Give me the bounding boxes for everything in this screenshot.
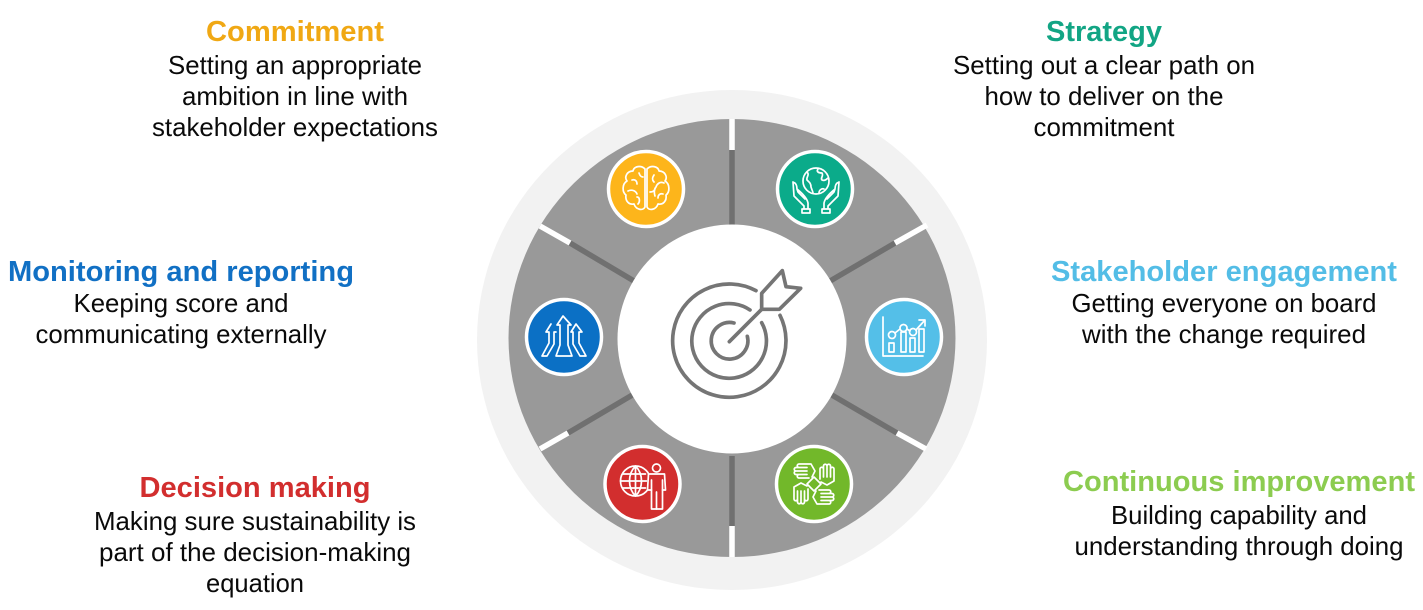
- text block: Stakeholder engagement: Stakeholder engagement: [1051, 256, 1397, 288]
- text block: Decision making: equation: [206, 570, 304, 598]
- icon: target with arrow: [673, 271, 801, 397]
- segment dividers: [540, 119, 927, 557]
- text block: Stakeholder engagement: with the change required: [1081, 321, 1366, 349]
- icon: brain: [608, 152, 684, 226]
- text block: Strategy: how to deliver on the: [984, 83, 1224, 111]
- text block: Continuous improvement: Building capability and: [1111, 502, 1367, 530]
- text block: Strategy: commitment: [1034, 114, 1174, 142]
- icon: person with globe: [605, 446, 680, 522]
- centre white disc: [618, 224, 846, 454]
- icon: globe in hands: [778, 152, 852, 226]
- text block: Continuous improvement: [1063, 466, 1415, 561]
- text block: Continuous improvement: Continuous improvement: [1063, 466, 1415, 498]
- icon: growth chart: [866, 300, 942, 374]
- text block: Monitoring and reporting: Monitoring and reporting: [8, 256, 354, 288]
- text block: Decision making: part of the decision-making: [99, 539, 411, 567]
- text block: Monitoring and reporting: [8, 256, 354, 349]
- text block: Commitment: ambition in line with: [182, 83, 408, 111]
- text block: Decision making: Making sure sustainability is: [94, 508, 416, 536]
- text block: Stakeholder engagement: [1051, 256, 1397, 349]
- icon: four hands: [776, 446, 852, 522]
- text block: Decision making: [94, 472, 416, 598]
- text block: Monitoring and reporting: communicating externally: [36, 321, 327, 349]
- text block: Strategy: [953, 16, 1255, 142]
- text block: Strategy: Setting out a clear path on: [953, 52, 1255, 80]
- text block: Commitment: stakeholder expectations: [152, 114, 438, 142]
- text block: Strategy: Strategy: [1046, 16, 1162, 48]
- icon: rising arrows: [526, 300, 602, 374]
- text block: Stakeholder engagement: Getting everyone on board: [1072, 290, 1376, 318]
- grey wheel: [508, 119, 956, 557]
- text block: Decision making: Decision making: [140, 472, 370, 504]
- text block: Monitoring and reporting: Keeping score and: [74, 290, 288, 318]
- outer light ring: [477, 90, 987, 590]
- text block: Commitment: Setting an appropriate: [168, 52, 422, 80]
- text block: Commitment: Commitment: [206, 16, 384, 48]
- text block: Continuous improvement: understanding through doing: [1074, 533, 1404, 561]
- panel: central wheel: [477, 90, 987, 590]
- text block: Commitment: [152, 16, 438, 142]
